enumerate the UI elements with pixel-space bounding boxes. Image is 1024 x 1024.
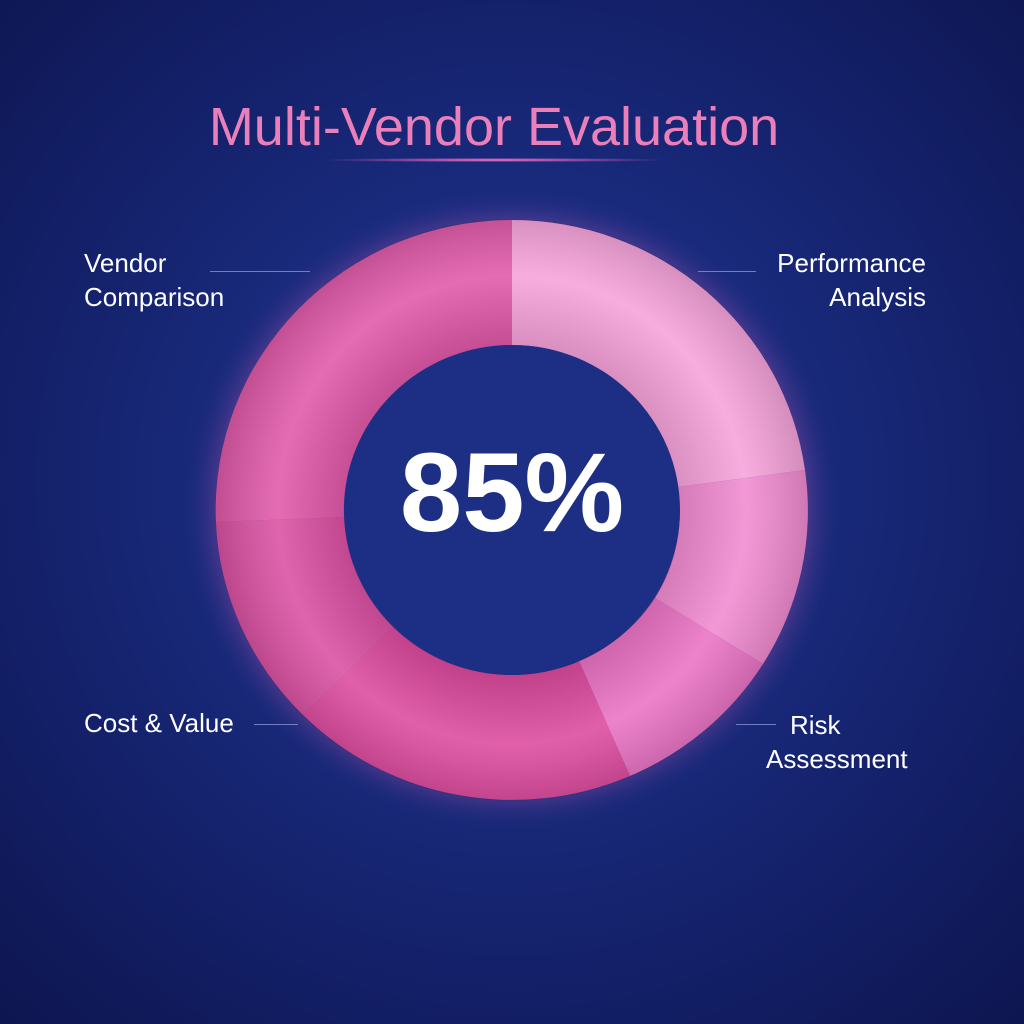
segment 2 — [655, 470, 808, 664]
segment: performance — [512, 220, 805, 487]
label: vendor comparison: Vendor — [84, 248, 166, 278]
label: performance analysis: Analysis — [829, 282, 926, 312]
label: performance analysis — [777, 248, 926, 312]
segment bottom — [303, 627, 630, 800]
segment: vendor comparison — [216, 220, 512, 522]
label: vendor comparison: Comparison — [84, 282, 224, 312]
label: performance analysis: Performance — [777, 248, 926, 278]
label: cost & value: Cost & Value — [84, 708, 234, 738]
label: risk assessment — [766, 710, 908, 774]
segment: risk — [579, 598, 763, 776]
label: risk assessment: Risk — [790, 710, 841, 740]
label: risk assessment: Assessment — [766, 744, 908, 774]
center value: 85% — [400, 430, 624, 555]
segment: cost — [216, 517, 393, 715]
title: Multi-Vendor Evaluation — [209, 97, 779, 157]
title glow underline — [330, 158, 660, 162]
label: vendor comparison — [84, 248, 224, 312]
